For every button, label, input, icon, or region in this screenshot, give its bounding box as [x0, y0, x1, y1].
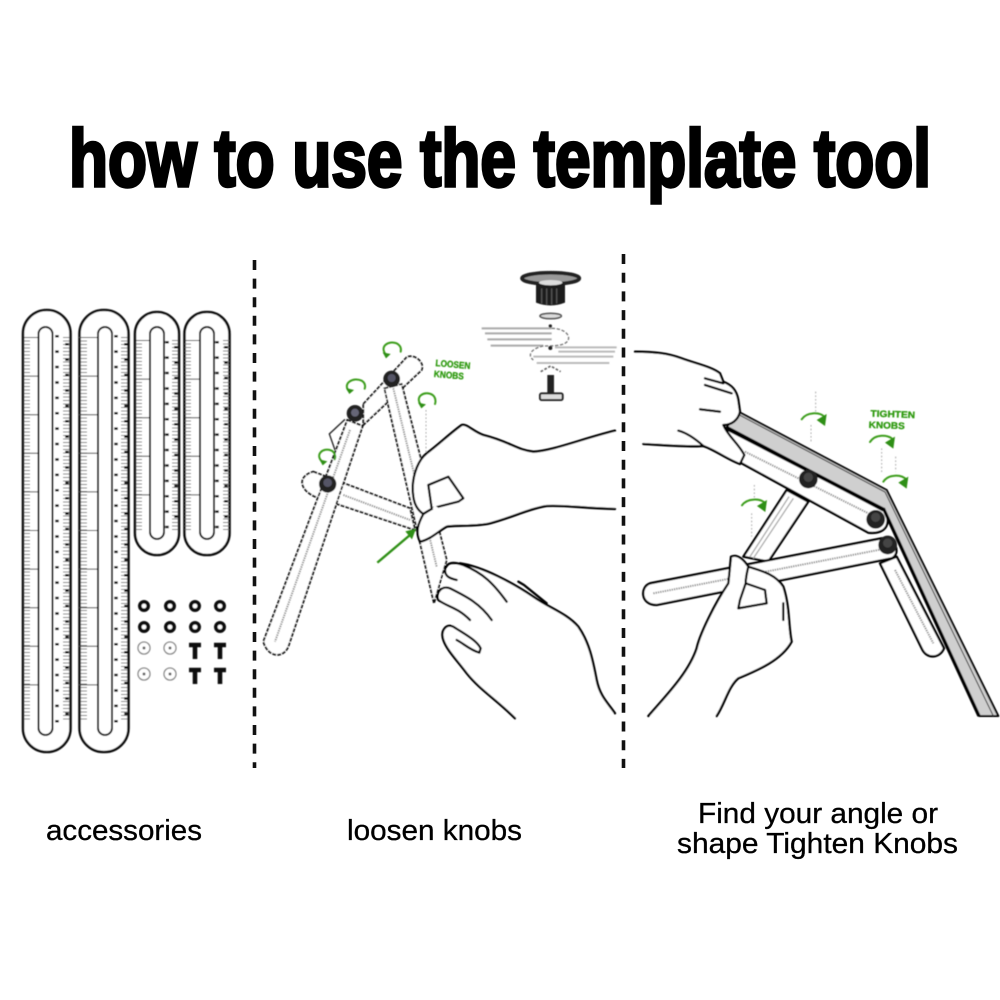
cross ruler: [643, 538, 896, 605]
ruler arm: cross: [302, 472, 415, 530]
knob washers and T bolts: [138, 602, 226, 684]
panel: loosen knobs illustration: [263, 273, 617, 718]
knobs: [799, 470, 897, 554]
caption: find your angle: shape Tighten Knobs: [677, 828, 958, 860]
ruler arm: long left: [263, 420, 363, 655]
ruler arm: cross slot: [343, 495, 410, 520]
icon: lower hand: [437, 563, 615, 718]
ruler arm: long left slot: [275, 430, 350, 642]
hidden strut: [329, 419, 345, 450]
short ruler 4: [184, 312, 230, 555]
divider: right dashed line: [622, 254, 625, 768]
caption: find your angle: Find your angle or: [698, 798, 939, 830]
strut ruler: [743, 490, 808, 562]
top ruler: [725, 428, 888, 533]
caption: loosen knobs: loosen knobs: [347, 815, 522, 847]
label: tighten knobs: TIGHTEN: [870, 409, 916, 420]
icon: top hand: [635, 352, 744, 464]
icon: bottom hand: [648, 556, 792, 716]
knobs: [319, 371, 400, 493]
caption: accessories: accessories: [46, 815, 202, 847]
label: loosen knobs: KNOBS: [433, 369, 464, 382]
divider: left dashed line: [253, 260, 256, 768]
label: tighten knobs: [869, 409, 916, 431]
caption: find your angle: [677, 798, 958, 860]
panel: accessories: [23, 310, 230, 752]
ruler arm: right: [384, 384, 447, 603]
panel: tighten knobs illustration: [635, 352, 998, 716]
ruler arm: right slot: [393, 388, 437, 567]
icon: upper hand: [413, 425, 615, 542]
label: tighten knobs: KNOBS: [869, 420, 905, 431]
ruler arm: top: [363, 356, 422, 425]
grey straight edge: [727, 412, 998, 716]
icon: green arrow to ruler: [377, 529, 416, 563]
icon: green rotation arrows: [319, 342, 436, 467]
long ruler 2: [80, 310, 128, 752]
exploded knob diagram: [482, 273, 617, 400]
lower-right ruler: [880, 557, 944, 656]
short ruler 3: [135, 312, 179, 555]
icon: green rotation arrows: [742, 392, 908, 537]
label: loosen knobs: LOOSEN: [435, 358, 471, 371]
label: loosen knobs: [433, 358, 471, 382]
long ruler 1: [23, 310, 70, 752]
